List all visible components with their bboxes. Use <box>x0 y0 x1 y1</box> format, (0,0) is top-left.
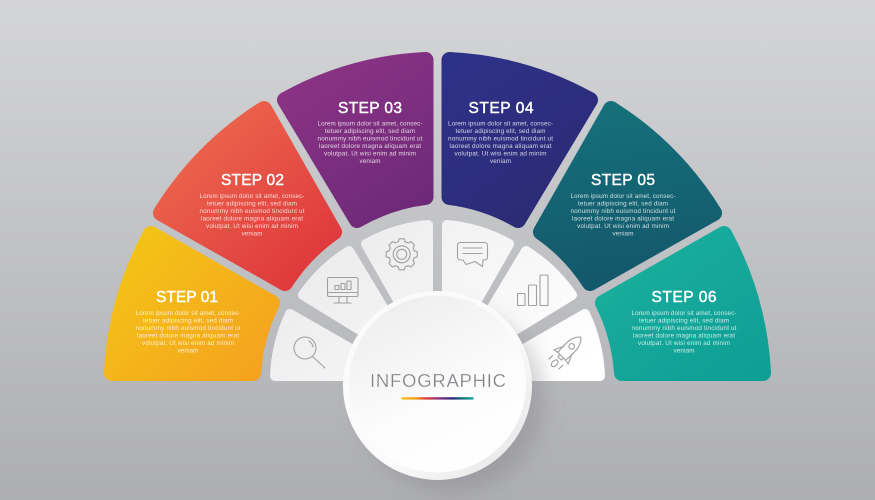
panel: step 02: veniam <box>242 230 262 238</box>
icon: gear <box>386 239 417 270</box>
panel: step 03: nonummy nibh euismod tincidunt ut <box>318 136 423 142</box>
panel: step 03 <box>285 60 426 220</box>
inner segment: monitor <box>303 251 385 333</box>
central circle badge <box>343 291 544 492</box>
panel: step 03: STEP 03 <box>338 100 402 117</box>
icon: bar chart <box>518 275 548 306</box>
panel: step 06: STEP 06 <box>652 289 716 306</box>
icon: magnifying glass <box>294 337 325 368</box>
inner segment: gear <box>366 225 428 310</box>
panel: step 05: Lorem ipsum dolor sit amet, consec- <box>570 193 676 200</box>
icon: monitor with chart <box>328 278 358 303</box>
panel: step 05: nonummy nibh euismod tincidunt ut <box>570 208 676 215</box>
panel: step 04 <box>448 60 590 220</box>
panel: step 05: tetuer adipiscing elit, sed diam <box>578 200 668 208</box>
panel: step 02: Lorem ipsum dolor sit amet, consec- <box>200 193 304 200</box>
panel: step 04: Lorem ipsum dolor sit amet, consec- <box>448 120 553 128</box>
inner segment: rocket <box>510 314 600 376</box>
panel: step 04: volutpat. Ut wisi enim ad minim <box>454 150 546 158</box>
panel: step 01: veniam <box>178 348 198 354</box>
panel: step 06: laoreet dolore magna aliquam erat <box>633 332 735 340</box>
panel: step 04: STEP 04 <box>468 100 534 117</box>
panel: step 06: veniam <box>674 348 694 354</box>
panel: step 03: laoreet dolore magna aliquam erat <box>319 143 421 150</box>
inner segment: search <box>275 314 365 376</box>
panel: step 03: tetuer adipiscing elit, sed diam <box>325 128 415 135</box>
panel: step 06: nonummy nibh euismod tincidunt ut <box>632 325 737 332</box>
panel: step 04: veniam <box>490 158 511 165</box>
panel: step 01: laoreet dolore magna aliquam erat <box>137 332 239 340</box>
panel: step 03: volutpat. Ut wisi enim ad minim <box>324 150 416 158</box>
panel: step 02: STEP 02 <box>221 172 284 189</box>
panel: step 06: volutpat. Ut wisi enim ad minim <box>638 340 730 347</box>
panel: step 06 <box>603 234 763 373</box>
panel: step 02: laoreet dolore magna aliquam erat <box>201 216 303 222</box>
panel: step 01: tetuer adipiscing elit, sed diam <box>143 318 233 324</box>
panel: step 01: STEP 01 <box>156 289 218 306</box>
panel: step 06: Lorem ipsum dolor sit amet, consec- <box>632 310 736 317</box>
panel: step 04: tetuer adipiscing elit, sed diam <box>456 128 546 135</box>
inner segment: bars <box>490 251 572 333</box>
panel: step 05: STEP 05 <box>591 172 655 189</box>
panel: step 05: laoreet dolore magna aliquam erat <box>572 216 674 222</box>
panel: step 01: nonummy nibh euismod tincidunt ut <box>136 325 241 332</box>
icon: rocket <box>545 330 588 373</box>
colour rule <box>402 397 474 400</box>
panel: step 05: veniam <box>612 230 634 238</box>
panel: step 05 <box>541 109 714 283</box>
inner segment: chat <box>447 225 509 310</box>
panel: step 03: Lorem ipsum dolor sit amet, consec- <box>318 120 422 128</box>
panel: step 02: nonummy nibh euismod tincidunt ut <box>200 208 305 215</box>
panel: step 06: tetuer adipiscing elit, sed diam <box>639 318 729 324</box>
panel: step 02: tetuer adipiscing elit, sed diam <box>207 200 297 208</box>
panel: step 05: volutpat. Ut wisi enim ad minim <box>577 223 669 230</box>
panel: step 01 <box>112 234 272 373</box>
panel: step 02: volutpat. Ut wisi enim ad minim <box>206 223 298 230</box>
panel: step 01: Lorem ipsum dolor sit amet, consec- <box>136 310 240 317</box>
title: infographic: INFOGRAPHIC <box>370 370 506 391</box>
panel: step 04: nonummy nibh euismod tincidunt ut <box>448 136 553 142</box>
icon: chat bubble <box>457 242 488 266</box>
panel: step 03: veniam <box>360 158 380 165</box>
panel: step 01: volutpat. Ut wisi enim ad minim <box>142 340 234 347</box>
panel: step 02 <box>161 109 334 283</box>
panel: step 04: laoreet dolore magna aliquam erat <box>450 143 552 150</box>
